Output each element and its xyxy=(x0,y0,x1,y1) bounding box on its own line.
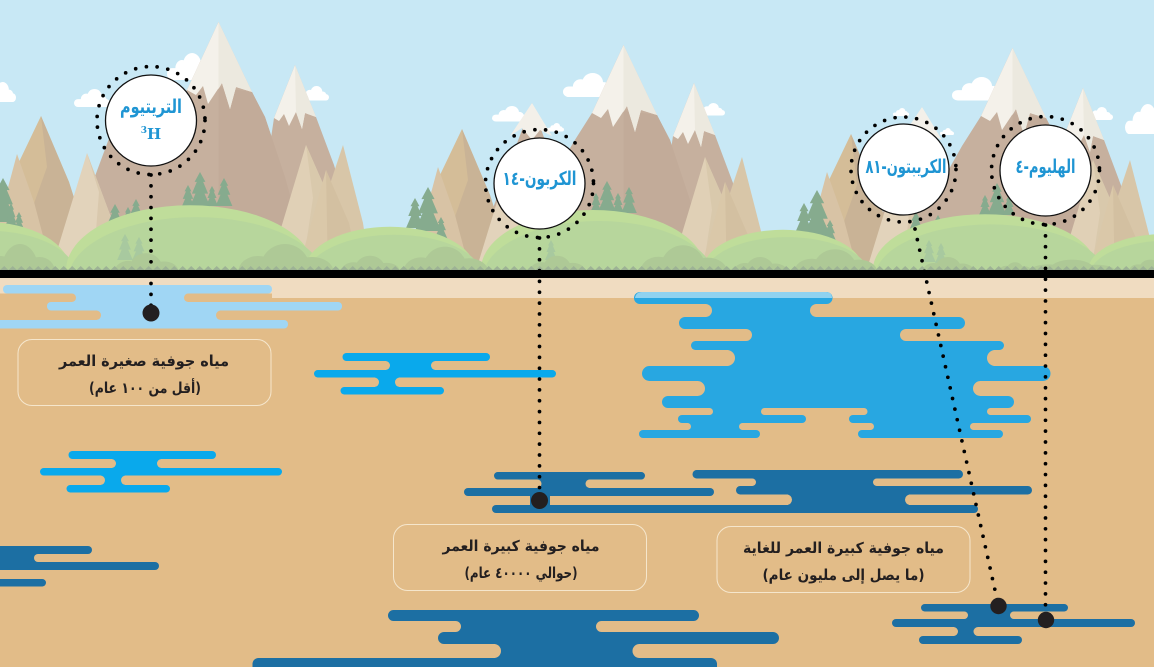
callout: very old groundwater: مياه جوفية كبيرة العمر للغاية xyxy=(743,539,944,557)
bushes xyxy=(0,244,1154,296)
marker: tritium: H xyxy=(147,125,161,143)
clouds xyxy=(0,53,1154,135)
marker: carbon-14 xyxy=(486,130,594,509)
marker: carbon-14: الكربون-١٤ xyxy=(502,168,576,190)
aquifer: old dark left xyxy=(0,546,159,586)
aquifer: mid blue 1 xyxy=(314,353,556,394)
hills xyxy=(0,205,1154,342)
marker: krypton-81: الكريبتون-٨١ xyxy=(866,156,946,178)
marker: helium-4 xyxy=(992,116,1100,628)
landscape: clouds, mountains, trees and hills xyxy=(0,22,1154,342)
black surface line xyxy=(0,270,1154,278)
callout: very old groundwater: (ما يصل إلى مليون عام) xyxy=(762,566,924,584)
aquifer: old dark bottom xyxy=(252,610,779,667)
marker: tritium: 3 xyxy=(141,126,147,136)
callout: old groundwater xyxy=(394,524,646,590)
aquifer: mid blue 2 xyxy=(40,451,282,492)
callout: old groundwater: (حوالي ٤٠٠٠٠ عام) xyxy=(465,564,578,582)
aquifer: large bright blue xyxy=(634,292,1077,438)
marker: tritium xyxy=(97,66,205,322)
callout: young groundwater: (أقل من ١٠٠ عام) xyxy=(89,378,201,397)
callout: old groundwater: مياه جوفية كبيرة العمر xyxy=(442,537,600,555)
mountains xyxy=(0,22,1154,295)
aquifer: old dark right xyxy=(892,604,1135,644)
ground edge grass xyxy=(0,266,1154,270)
faint trees on hills xyxy=(117,234,947,263)
ground: sand layers xyxy=(0,270,1154,667)
trees xyxy=(0,172,1015,244)
aquifer: young light blue xyxy=(0,285,392,328)
marker: helium-4: الهليوم-٤ xyxy=(1016,156,1076,178)
callout: young groundwater: مياه جوفية صغيرة العمر xyxy=(58,352,229,370)
callout: young groundwater xyxy=(18,340,271,406)
marker: tritium: التريتيوم xyxy=(120,96,182,118)
callout: very old groundwater xyxy=(717,526,970,592)
aquifer: old dark centre xyxy=(464,470,1032,513)
marker: krypton-81 xyxy=(851,117,1007,614)
sky background xyxy=(0,0,1154,272)
